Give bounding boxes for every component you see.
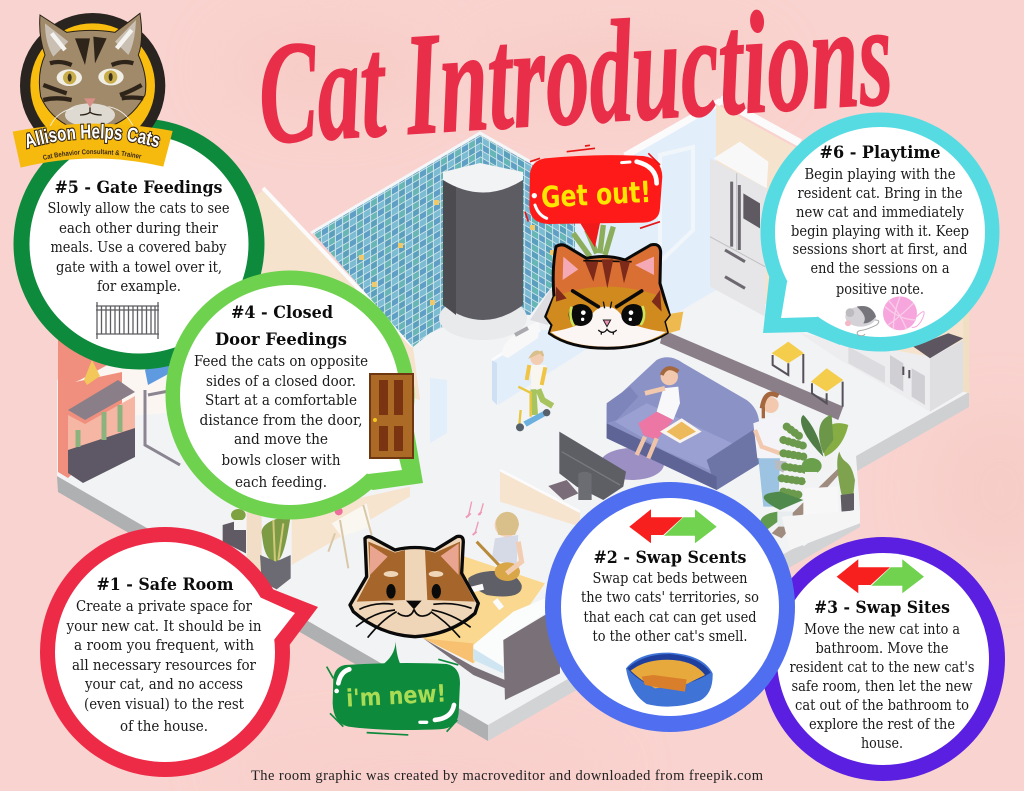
- text block: Feed the cats on opposite: [194, 354, 368, 370]
- panel: #3 Swap Sites: [761, 537, 1005, 781]
- text block: the two cats' territories, so: [581, 590, 759, 606]
- panel: #4 Closed Door Feedings: [166, 270, 423, 520]
- text block: [790, 622, 974, 752]
- speech bubble: Get out!: Get out!: [540, 175, 652, 215]
- shower cylinder: [439, 163, 527, 340]
- text block: each feeding.: [235, 475, 327, 491]
- icon: toy mouse: [845, 306, 879, 336]
- text block: gate with a towel over it,: [56, 260, 222, 276]
- plants on stand: [760, 415, 860, 550]
- rug: [600, 448, 664, 480]
- text block: positive note.: [836, 282, 924, 298]
- tan kitchen wall: [716, 99, 969, 392]
- speech bubble: I'm new!: [327, 642, 460, 735]
- text block: Move the new cat into a: [804, 622, 960, 638]
- bed with woman playing guitar: [423, 502, 560, 700]
- text block: explore the rest of the: [809, 717, 955, 733]
- text block: resident cat to the new cat's: [790, 660, 974, 676]
- panel: #1 Safe Room: [40, 527, 318, 777]
- cat: resident orange tabby: [525, 145, 669, 348]
- heading: #3 - Swap Sites: [814, 598, 950, 618]
- text block: [581, 571, 759, 645]
- text block: that each cat can get used: [584, 610, 756, 626]
- kid on scooter: [516, 351, 553, 431]
- logo ribbon: Cat Behavior Consultant & Trainer: [43, 149, 142, 160]
- icon: swap arrows: [629, 509, 717, 543]
- text block: end the sessions on a: [810, 261, 950, 277]
- hanging plant behind cat: [573, 225, 613, 257]
- text block: begin playing with it. Keep: [791, 224, 969, 240]
- heading: #4 - Closed: [231, 303, 333, 323]
- text block: [791, 167, 969, 298]
- footer credit: The room graphic was created by macroveditor and downloaded from freepik.com: [251, 768, 764, 784]
- text block: house.: [861, 736, 903, 752]
- sofa with woman eating pizza: [607, 357, 760, 490]
- text block: for example.: [97, 279, 181, 295]
- text block: (even visual) to the rest: [84, 697, 244, 713]
- text block: [66, 599, 262, 735]
- logo ring: [20, 13, 165, 158]
- icon: gate: [96, 302, 159, 339]
- floor slab: [57, 190, 969, 741]
- text block: of the house.: [120, 719, 208, 735]
- bedroom wall, easel, plant and side table: [223, 470, 580, 589]
- room illustration: isometric apartment: [57, 99, 969, 741]
- icon: door: [370, 374, 413, 458]
- toilet and blue partition: [430, 290, 620, 443]
- text block: to the other cat's smell.: [592, 629, 748, 645]
- text block: bathroom. Move the: [816, 641, 948, 657]
- logo: Allison Helps Cats: [12, 12, 173, 168]
- head: [350, 536, 478, 638]
- logo ribbon: Allison Helps Cats: [26, 122, 160, 150]
- panel: #5 Gate Feedings: [14, 118, 264, 370]
- text block: Create a private space for: [76, 599, 252, 615]
- fridge: [710, 142, 768, 317]
- text block: [194, 354, 368, 491]
- heading: #5 - Gate Feedings: [54, 178, 222, 198]
- text block: sides of a closed door.: [206, 374, 356, 390]
- text block: Swap cat beds between: [592, 571, 748, 587]
- heading: [215, 303, 347, 350]
- woman watering plants: [753, 394, 787, 507]
- logo cat face: [39, 13, 146, 130]
- text block: meals. Use a covered baby: [50, 240, 227, 256]
- tan wall, left: [170, 188, 420, 400]
- TV: [548, 432, 626, 500]
- text block: [48, 201, 230, 295]
- speech bubble: Get out!: [525, 145, 662, 247]
- icon: cat bed: [626, 653, 713, 707]
- text block: sessions short at first, and: [792, 242, 968, 258]
- text block: Start at a comfortable: [205, 393, 357, 409]
- light-blue wall and door frame: [575, 101, 721, 340]
- text block: each other during their: [59, 221, 218, 237]
- text block: your cat, and no access: [84, 677, 243, 693]
- cat: new brown cat: [327, 536, 478, 735]
- text block: your new cat. It should be in: [66, 619, 262, 635]
- text block: safe room, then let the new: [792, 679, 973, 695]
- text block: new cat and immediately: [796, 205, 965, 221]
- heading: #1 - Safe Room: [96, 575, 234, 595]
- text block: resident cat. Bring in the: [798, 186, 962, 202]
- text block: cat out of the bathroom to: [795, 698, 969, 714]
- icon: swap arrows: [837, 559, 924, 593]
- speech bubble: I'm new!: i'm new!: [345, 679, 447, 713]
- coral wall with aquarium: [58, 290, 200, 483]
- text block: a room you frequent, with: [74, 638, 254, 654]
- text block: and move the: [234, 432, 328, 448]
- heading: #6 - Playtime: [820, 143, 941, 163]
- heading: Door Feedings: [215, 330, 347, 350]
- kitchen cabinets: [800, 310, 969, 412]
- icon: yarn ball: [883, 296, 924, 330]
- head: [546, 245, 669, 348]
- text block: Begin playing with the: [804, 167, 956, 183]
- text block: distance from the door,: [200, 413, 362, 429]
- tiled bathroom walls: [311, 133, 580, 347]
- text block: bowls closer with: [222, 453, 340, 469]
- counter and stools: [660, 312, 843, 420]
- logo ribbon: [12, 122, 173, 168]
- heading: #2 - Swap Scents: [594, 548, 746, 568]
- text block: Slowly allow the cats to see: [48, 201, 230, 217]
- text block: all necessary resources for: [72, 658, 256, 674]
- panel: #2 Swap Scents: [545, 482, 795, 732]
- panel: #6 Playtime: [760, 112, 1000, 352]
